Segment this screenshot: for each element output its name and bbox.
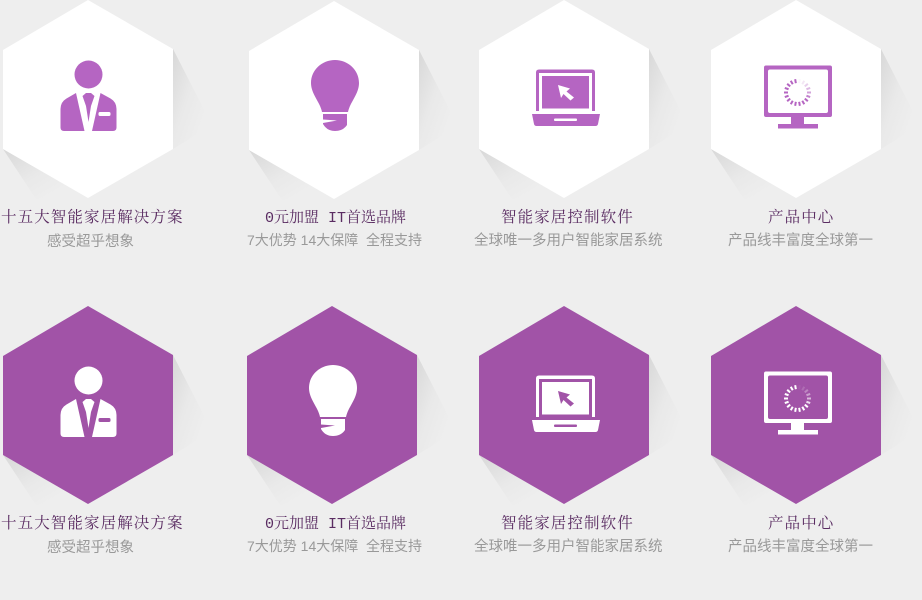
- heading: solutions: 十五大智能家居解决方案: [1, 208, 184, 227]
- panel: top solutions card: [1, 0, 212, 250]
- icon: light bulb: [309, 365, 357, 436]
- text: solutions subtitle: 感受超乎想象: [47, 539, 134, 556]
- panel: top software card: [474, 0, 688, 249]
- heading: software: 智能家居控制软件: [501, 208, 634, 227]
- panel: bottom solutions card: [1, 306, 212, 556]
- icon: businessman: [60, 60, 116, 131]
- panel: top product card: [711, 0, 920, 249]
- panel: bottom franchise card: [247, 306, 456, 554]
- heading: products: 产品中心: [768, 208, 834, 227]
- heading: franchise: 0元加盟 IT首选品牌: [265, 515, 406, 533]
- panel: bottom product card: [711, 306, 920, 555]
- icon: monitor with spinner: [764, 372, 832, 434]
- text: software subtitle: 全球唯一多用户智能家居系统: [474, 537, 662, 555]
- icon: laptop with cursor: [532, 376, 600, 432]
- icon: light bulb: [311, 60, 359, 131]
- text: franchise subtitle: 7大优势 14大保障 全程支持: [247, 232, 422, 248]
- heading: solutions: 十五大智能家居解决方案: [1, 514, 184, 533]
- heading: software: 智能家居控制软件: [501, 514, 634, 533]
- text: products subtitle: 产品线丰富度全球第一: [728, 231, 873, 249]
- text: franchise subtitle: 7大优势 14大保障 全程支持: [247, 538, 422, 554]
- text: products subtitle: 产品线丰富度全球第一: [728, 537, 873, 555]
- panel: top franchise card: [247, 1, 458, 248]
- heading: franchise: 0元加盟 IT首选品牌: [265, 209, 406, 227]
- icon: laptop with cursor: [532, 70, 600, 126]
- icon: businessman: [60, 366, 116, 437]
- panel: bottom software card: [474, 306, 688, 555]
- icon: monitor with spinner: [764, 66, 832, 128]
- text: software subtitle: 全球唯一多用户智能家居系统: [474, 231, 662, 249]
- text: solutions subtitle: 感受超乎想象: [47, 233, 134, 250]
- heading: products: 产品中心: [768, 514, 834, 533]
